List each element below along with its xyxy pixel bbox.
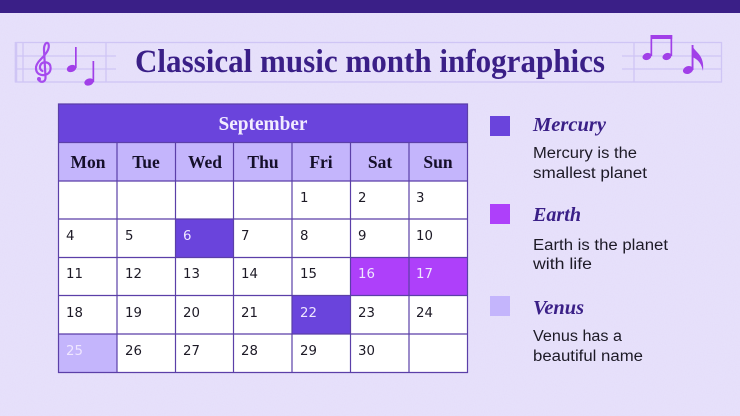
legend: Venus: Venus has a (533, 328, 622, 345)
day numbers: 6 (183, 229, 191, 244)
day numbers: 17 (416, 267, 433, 282)
day numbers: 28 (241, 344, 258, 359)
title: Classical music month infographics (135, 44, 605, 80)
day numbers: 23 (358, 306, 375, 321)
day numbers: 5 (125, 229, 133, 244)
icon: beamed notes (642, 35, 672, 61)
top bar (0, 0, 740, 13)
weekday header: Thu (247, 152, 279, 172)
weekday header (58, 142, 468, 181)
day numbers: 29 (300, 344, 317, 359)
day numbers: 7 (241, 229, 249, 244)
day numbers: 13 (183, 267, 200, 282)
day numbers: 3 (416, 191, 424, 206)
day numbers: 20 (183, 306, 200, 321)
icon: treble clef (36, 43, 51, 82)
weekday header: Sun (423, 152, 453, 172)
day numbers: 12 (125, 267, 142, 282)
day numbers: 26 (125, 344, 142, 359)
legend: Mercury: Mercury (532, 114, 606, 136)
weekday header: Wed (188, 152, 222, 172)
legend: Earth: Earth is the planet (533, 237, 669, 254)
weekday header: Tue (132, 152, 160, 172)
calendar table (58, 104, 468, 372)
day numbers: 2 (358, 191, 366, 206)
day numbers: 15 (300, 267, 317, 282)
day numbers: 30 (358, 344, 375, 359)
weekday header: Mon (70, 152, 106, 172)
legend: Earth: with life (532, 256, 592, 273)
weekday header: Sat (368, 152, 392, 172)
icon: eighth note (682, 45, 703, 75)
day numbers: 11 (66, 267, 83, 282)
day numbers: 24 (416, 306, 433, 321)
day numbers: 19 (125, 306, 142, 321)
legend: Venus: beautiful name (533, 348, 643, 365)
day numbers: 9 (358, 229, 366, 244)
day numbers: 16 (358, 267, 375, 282)
legend: Mercury (490, 114, 648, 182)
day numbers (66, 191, 433, 359)
legend: Venus: Venus (533, 297, 584, 319)
weekday header: Fri (309, 152, 333, 172)
day numbers: 22 (300, 306, 317, 321)
day numbers: 14 (241, 267, 258, 282)
legend: Venus (490, 296, 643, 365)
day numbers: 10 (416, 229, 433, 244)
staff band (15, 42, 722, 82)
legend: Mercury: smallest planet (533, 165, 648, 182)
day numbers: 4 (66, 229, 74, 244)
day numbers: 1 (300, 191, 308, 206)
day numbers: 18 (66, 306, 83, 321)
day numbers: 27 (183, 344, 200, 359)
month header (58, 104, 468, 142)
legend: Earth (490, 204, 669, 273)
highlighted days (58, 219, 468, 372)
legend: Earth: Earth (532, 204, 581, 226)
month header: September (218, 114, 308, 135)
icon: quarter notes (66, 47, 95, 87)
day numbers: 25 (66, 344, 83, 359)
calendar white body (58, 181, 468, 372)
day numbers: 8 (300, 229, 308, 244)
legend: Mercury: Mercury is the (533, 145, 637, 162)
day numbers: 21 (241, 306, 258, 321)
